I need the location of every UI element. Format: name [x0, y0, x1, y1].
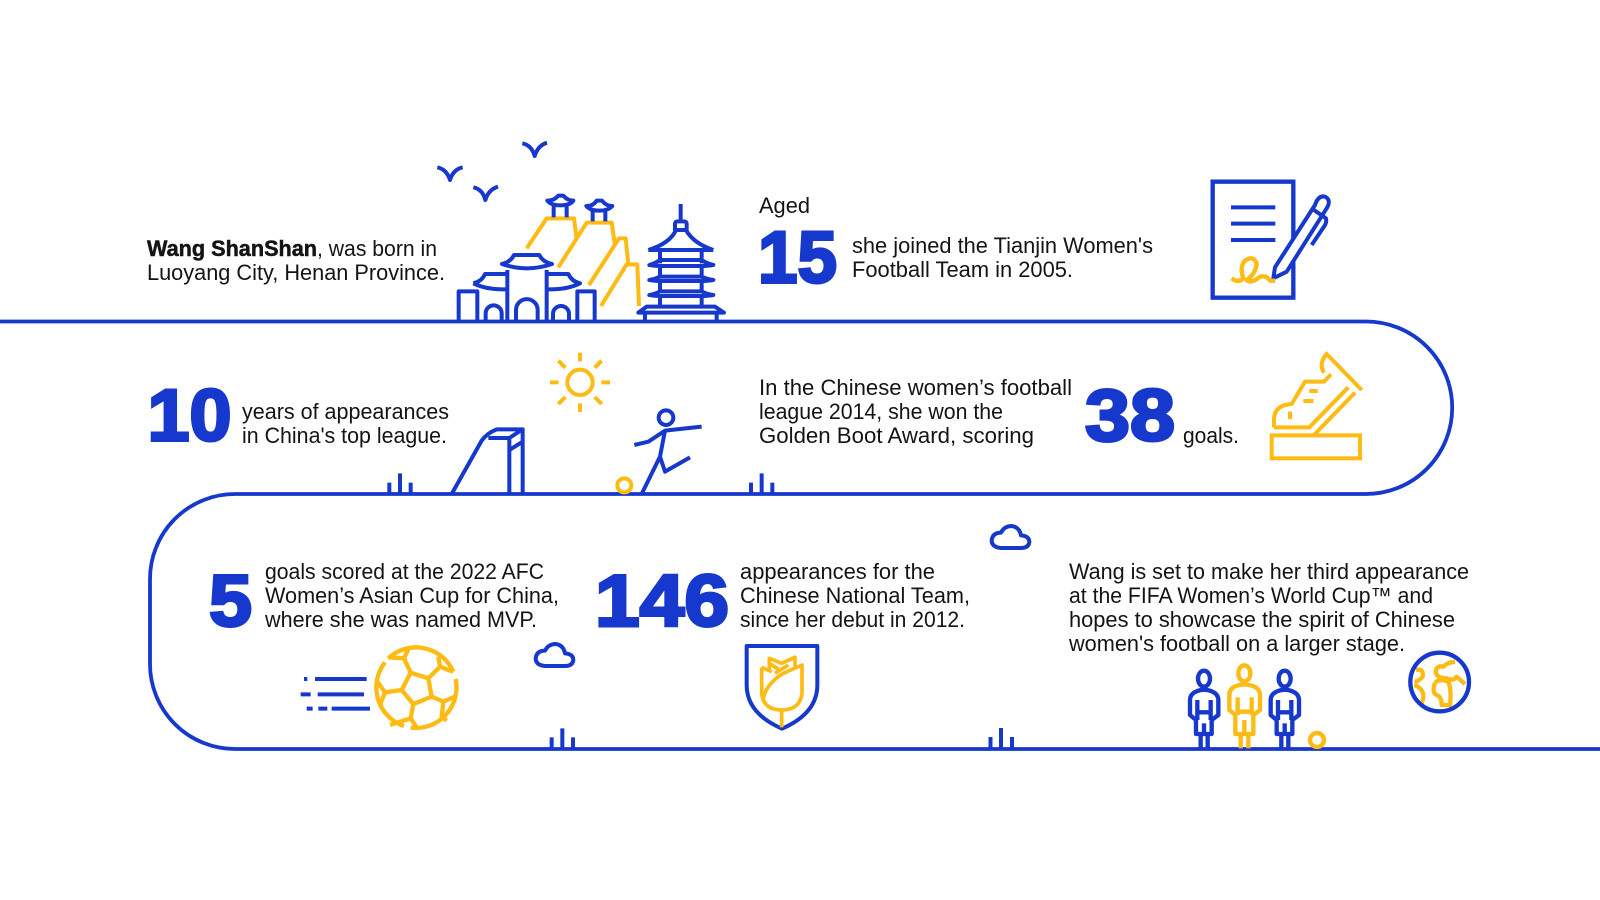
icon: ball [617, 478, 631, 492]
text: golden boot: league 2014, she won the [759, 399, 1003, 424]
icon: cloud [992, 526, 1029, 548]
text: birthplace: Luoyang City, Henan Province. [147, 260, 445, 285]
text: joined team at 15 [758, 193, 1153, 298]
text: golden boot: In the Chinese women’s football [759, 375, 1072, 400]
icon: grass tufts [389, 473, 772, 494]
text: 146 appearances [595, 559, 970, 642]
icon: goal [452, 429, 523, 494]
icon: rose shield [747, 646, 817, 729]
icon: sun [550, 353, 610, 412]
winding timeline path [0, 322, 1600, 749]
icon: goal, sun, kicker and grass [389, 353, 772, 494]
text: golden boot [759, 375, 1239, 456]
icon: city gate [459, 255, 595, 322]
text: 5 goals: Women’s Asian Cup for China, [265, 583, 559, 608]
icon: yellow player [1229, 665, 1260, 748]
text: 146 appearances: appearances for the [740, 559, 935, 584]
text: third world cup: at the FIFA Women’s World Cup™ and [1069, 583, 1433, 608]
icon: contract and pen [1213, 182, 1329, 298]
text: golden boot: Golden Boot Award, scoring [759, 423, 1034, 448]
text: joined team at 15: Aged [759, 193, 810, 218]
text: joined team at 15: she joined the Tianjin Women's [852, 233, 1153, 258]
icon: globe [1410, 653, 1469, 711]
text: third world cup: women's football on a larger stage. [1068, 631, 1405, 656]
text: 10 years: years of appearances [242, 399, 449, 424]
text: joined team at 15: Football Team in 2005. [852, 257, 1073, 282]
text: joined team at 15: 15 [758, 218, 837, 298]
icon: cloud [536, 644, 573, 666]
icon: pagoda [638, 204, 724, 322]
text: 5 goals [209, 559, 559, 642]
text: third world cup: Wang is set to make her third appearance [1069, 559, 1469, 584]
icon: birds, temples and pagoda [437, 143, 724, 322]
text: 10 years: 10 [148, 376, 232, 456]
icon: blue player [1271, 671, 1299, 748]
text: 146 appearances: 146 [595, 561, 729, 642]
icon: grass tuft [990, 728, 1012, 749]
icon: golden boot [1272, 354, 1362, 458]
icon: kicking player [634, 410, 702, 494]
icon: ball [1310, 733, 1324, 747]
text: 5 goals: goals scored at the 2022 AFC [265, 559, 544, 584]
icon: players, ball and globe [1190, 653, 1469, 748]
icon: speed lines [301, 679, 370, 709]
text: 10 years: in China's top league. [242, 423, 447, 448]
text: birthplace [147, 236, 445, 285]
icon: hilltop pavilions [547, 196, 612, 221]
text: 146 appearances: since her debut in 2012. [740, 607, 965, 632]
text: 5 goals: where she was named MVP. [264, 607, 537, 632]
icon: grass tuft [552, 728, 573, 749]
text: golden boot: 38 [1085, 376, 1175, 456]
icon: birds [437, 143, 547, 200]
text: birthplace: Wang ShanShan [147, 236, 317, 261]
text: golden boot: goals. [1183, 423, 1239, 448]
text: 146 appearances: Chinese National Team, [740, 583, 970, 608]
icon: flying football, cloud and grass [301, 644, 573, 749]
icon: yellow mountain steps [527, 218, 639, 306]
text: birthplace: , was born in [317, 236, 437, 261]
text: third world cup [1068, 559, 1469, 656]
icon: football [376, 647, 457, 728]
text: 5 goals: 5 [209, 561, 252, 642]
text: third world cup: hopes to showcase the spirit of Chinese [1069, 607, 1455, 632]
icon: blue player [1190, 671, 1218, 748]
text: 10 years [148, 376, 449, 456]
